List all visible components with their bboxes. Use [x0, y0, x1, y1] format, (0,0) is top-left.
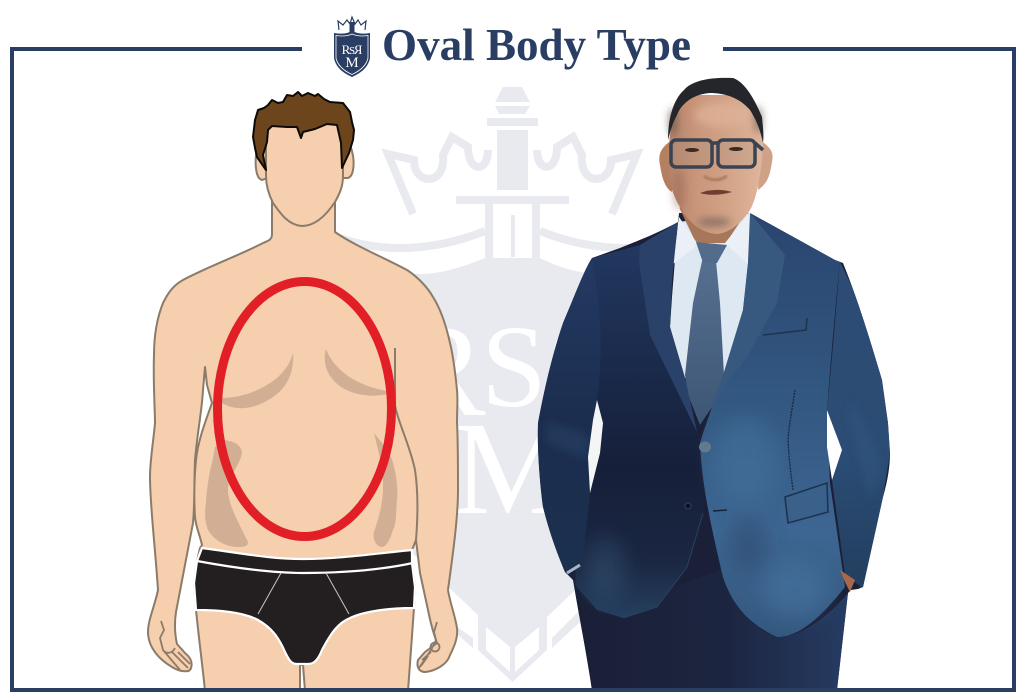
- man: right lapel: [703, 213, 785, 433]
- man: suit: [530, 205, 900, 695]
- watermark: monogram letters: [397, 296, 628, 542]
- figure: face: [266, 120, 343, 226]
- figure: body shading: [205, 349, 397, 547]
- man: left arm gap: [588, 400, 603, 493]
- man: right arm gap: [827, 410, 842, 480]
- logo: crest: S: [349, 45, 355, 57]
- watermark: monogram letters: M: [453, 394, 571, 542]
- figure: ears: [256, 145, 354, 180]
- watermark: monogram letters: R: [539, 296, 628, 444]
- man: ears: [659, 140, 773, 192]
- man: shirt collar: [673, 211, 751, 264]
- man: chest pocket: [763, 318, 807, 335]
- man: tie: [685, 242, 727, 425]
- watermark: crown: [340, 87, 685, 682]
- title block: [334, 17, 691, 77]
- logo: crest: R: [353, 42, 362, 57]
- man: hair: [668, 78, 763, 143]
- watermark: monogram letters: S: [481, 301, 547, 432]
- man: left sleeve: [538, 258, 601, 574]
- watermark: brand crest: [340, 87, 685, 682]
- figure: hand details: [160, 621, 440, 670]
- figure: briefs: [194, 548, 415, 664]
- photo stand-in: man in navy suit: [530, 78, 900, 695]
- man: nose and mouth: [700, 176, 732, 195]
- logo: crest: [334, 17, 370, 77]
- illustrated figure: oval body type: [148, 92, 458, 691]
- man: left jacket panel: [575, 245, 703, 618]
- man: right sleeve: [827, 262, 890, 590]
- man: face: [668, 95, 763, 234]
- man: jacket opening edge: [623, 513, 703, 618]
- logo: crest: R: [342, 42, 351, 57]
- man: right jacket panel: [700, 213, 845, 637]
- figure: red oval marker: [218, 282, 392, 536]
- man: sleeve fold shading: [548, 425, 588, 456]
- man: shirt: [670, 213, 750, 378]
- figure: body outline: [148, 200, 458, 691]
- man: eyes: [685, 147, 743, 152]
- man: flap pocket: [785, 483, 828, 523]
- man: glasses: [671, 140, 763, 167]
- figure: right arm crease: [395, 348, 417, 540]
- man: trousers: [575, 586, 848, 688]
- logo: crest: M: [345, 55, 359, 71]
- man: left lapel: [639, 222, 697, 432]
- man: hand in pocket: [840, 570, 855, 592]
- watermark: monogram letters: R: [397, 296, 486, 444]
- figure: hair: [253, 92, 354, 170]
- man: shirt cuff: [567, 565, 580, 573]
- man: neck shadow: [680, 206, 740, 243]
- man: fabric highlights: [585, 418, 827, 618]
- man: facial shading: [669, 103, 762, 226]
- title text: Oval Body Type: [382, 20, 691, 70]
- man: dart seam: [788, 390, 795, 490]
- man: jacket buttons: [685, 442, 727, 511]
